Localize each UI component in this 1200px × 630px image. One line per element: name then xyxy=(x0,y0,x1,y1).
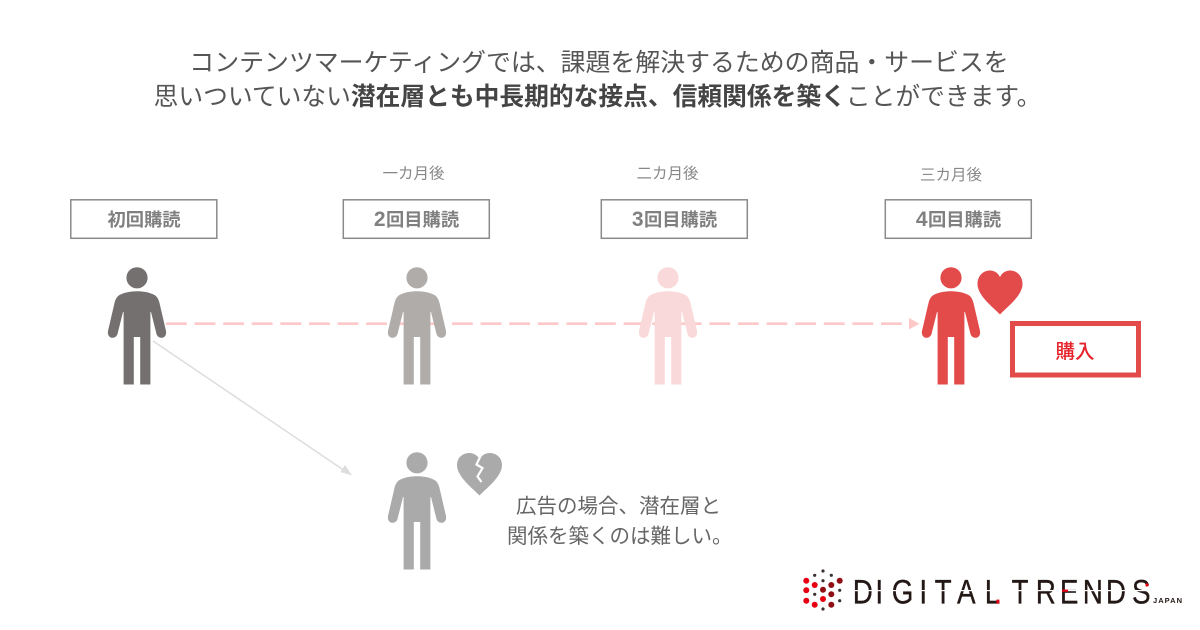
wordmark suffix: JAPAN xyxy=(1153,596,1182,605)
icon: heart xyxy=(978,270,1022,314)
person: fourth purchase xyxy=(922,267,980,384)
label box: second purchase xyxy=(343,200,489,238)
timing label: one month later: 一カ月後 xyxy=(382,164,445,182)
logo: Digital Trends Japan xyxy=(803,569,1182,611)
label box: third purchase xyxy=(601,200,747,238)
label box: fourth purchase xyxy=(885,200,1031,238)
person: advertising case xyxy=(388,452,446,570)
person: first purchase xyxy=(108,267,166,384)
title: 思いついていない潜在層とも中長期的な接点、信頼関係を築くことができます。 xyxy=(154,83,1041,111)
label box: first purchase xyxy=(71,200,217,238)
wordmark: DIGITAL. TRENDS xyxy=(853,573,1151,611)
callout: purchase xyxy=(1012,324,1138,375)
text block: advertising note xyxy=(507,495,732,548)
timing label: two months later: 二カ月後 xyxy=(636,164,699,182)
title xyxy=(154,49,1041,111)
label box: second purchase: 2回目購読 xyxy=(374,208,459,231)
callout: purchase: 購入 xyxy=(1055,341,1095,363)
timing label: three months later: 三カ月後 xyxy=(920,166,982,184)
arrow: diagonal to advertising case xyxy=(153,341,352,476)
text block: advertising note: 関係を築くのは難しい。 xyxy=(507,525,732,548)
title: コンテンツマーケティングでは、課題を解決するための商品・サービスを xyxy=(189,49,1009,77)
label box: fourth purchase: 4回目購読 xyxy=(916,208,1001,231)
arrow: dashed timeline xyxy=(166,318,920,329)
icon: logo dots xyxy=(803,569,843,611)
person: second purchase xyxy=(388,267,446,384)
person: third purchase xyxy=(639,267,697,384)
icon: broken heart xyxy=(457,453,502,496)
label box: first purchase: 初回購読 xyxy=(107,209,181,230)
label box: third purchase: 3回目購読 xyxy=(632,208,717,231)
text block: advertising note: 広告の場合、潜在層と xyxy=(516,495,721,518)
